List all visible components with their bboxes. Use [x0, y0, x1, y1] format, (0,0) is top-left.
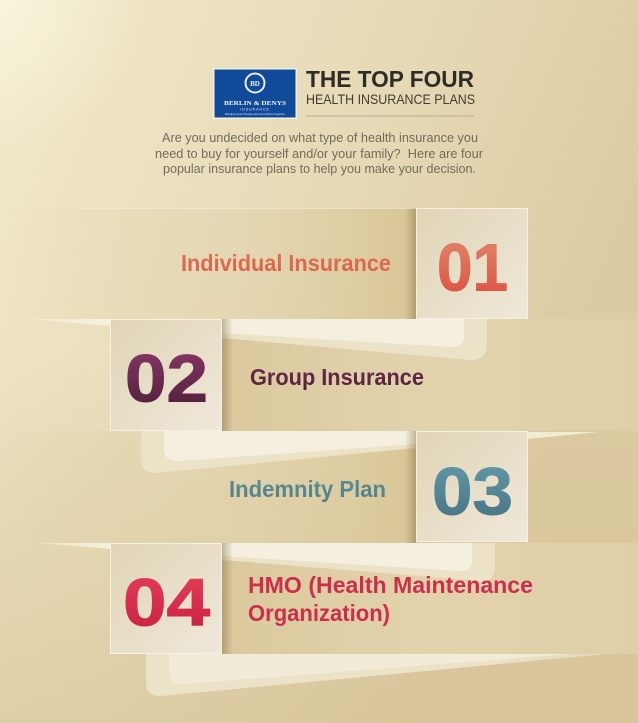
- tile 02: [110, 320, 222, 430]
- tile 01: [416, 208, 528, 318]
- band 1 top highlight: [80, 208, 416, 209]
- label: HMO: Organization): [248, 600, 390, 626]
- label: HMO: HMO (Health Maintenance: [248, 572, 533, 598]
- band 3: [0, 431, 416, 543]
- label: HMO: [248, 572, 533, 626]
- bottom fold: [146, 654, 606, 696]
- logo: Berlin & Denys Insurance: BERLIN & DENYS: [224, 100, 286, 107]
- title: THE TOP FOUR: [306, 66, 474, 92]
- header: [155, 66, 484, 176]
- bottom fold outer: [146, 654, 606, 696]
- bottom fold inner: [169, 654, 570, 684]
- logo: Berlin & Denys Insurance: INSURANCE: [240, 108, 270, 112]
- number 02: 02: [125, 342, 208, 416]
- number 04: 04: [123, 566, 210, 640]
- sliver 2: [30, 319, 110, 326]
- ribbon 3: [0, 431, 598, 543]
- intro text: Are you undecided on what type of health insurance you: [162, 130, 478, 145]
- subtitle: HEALTH INSURANCE PLANS: [306, 91, 475, 107]
- number 01: 01: [437, 230, 508, 306]
- fold 4 outer: [222, 543, 495, 581]
- label: Individual Insurance: Individual Insurance: [181, 250, 391, 276]
- band 4: [222, 543, 638, 654]
- number 03: 03: [432, 454, 513, 530]
- fold 4 inner: [222, 543, 472, 571]
- fold 3 inner: [164, 431, 416, 461]
- sliver 3: [528, 432, 598, 439]
- intro text: need to buy for yourself and/or your family? Here are four: [155, 146, 484, 161]
- fold 3 outer: [141, 431, 416, 473]
- band 2: [222, 319, 638, 431]
- label: Group Insurance: Group Insurance: [250, 364, 424, 390]
- fold 2 inner: [222, 319, 464, 347]
- ribbon 4: [39, 543, 638, 654]
- intro text: [155, 130, 484, 176]
- sliver 4: [39, 543, 110, 549]
- intro text: popular insurance plans to help you make your decision.: [163, 161, 476, 176]
- logo: Berlin & Denys Insurance: BD: [250, 80, 260, 88]
- label: Indemnity Plan: Indemnity Plan: [229, 476, 386, 502]
- ribbon 1: [0, 208, 528, 319]
- logo: Berlin & Denys Insurance: [213, 68, 297, 119]
- header rule: [306, 116, 474, 117]
- fold 2 outer: [222, 319, 487, 360]
- tile 03: [416, 432, 528, 542]
- band 1: [0, 208, 416, 319]
- ribbon 2: [30, 319, 638, 431]
- logo: Berlin & Denys Insurance: Bringing Good People and Good Plans Together: [225, 112, 285, 116]
- tile 04: [110, 544, 222, 654]
